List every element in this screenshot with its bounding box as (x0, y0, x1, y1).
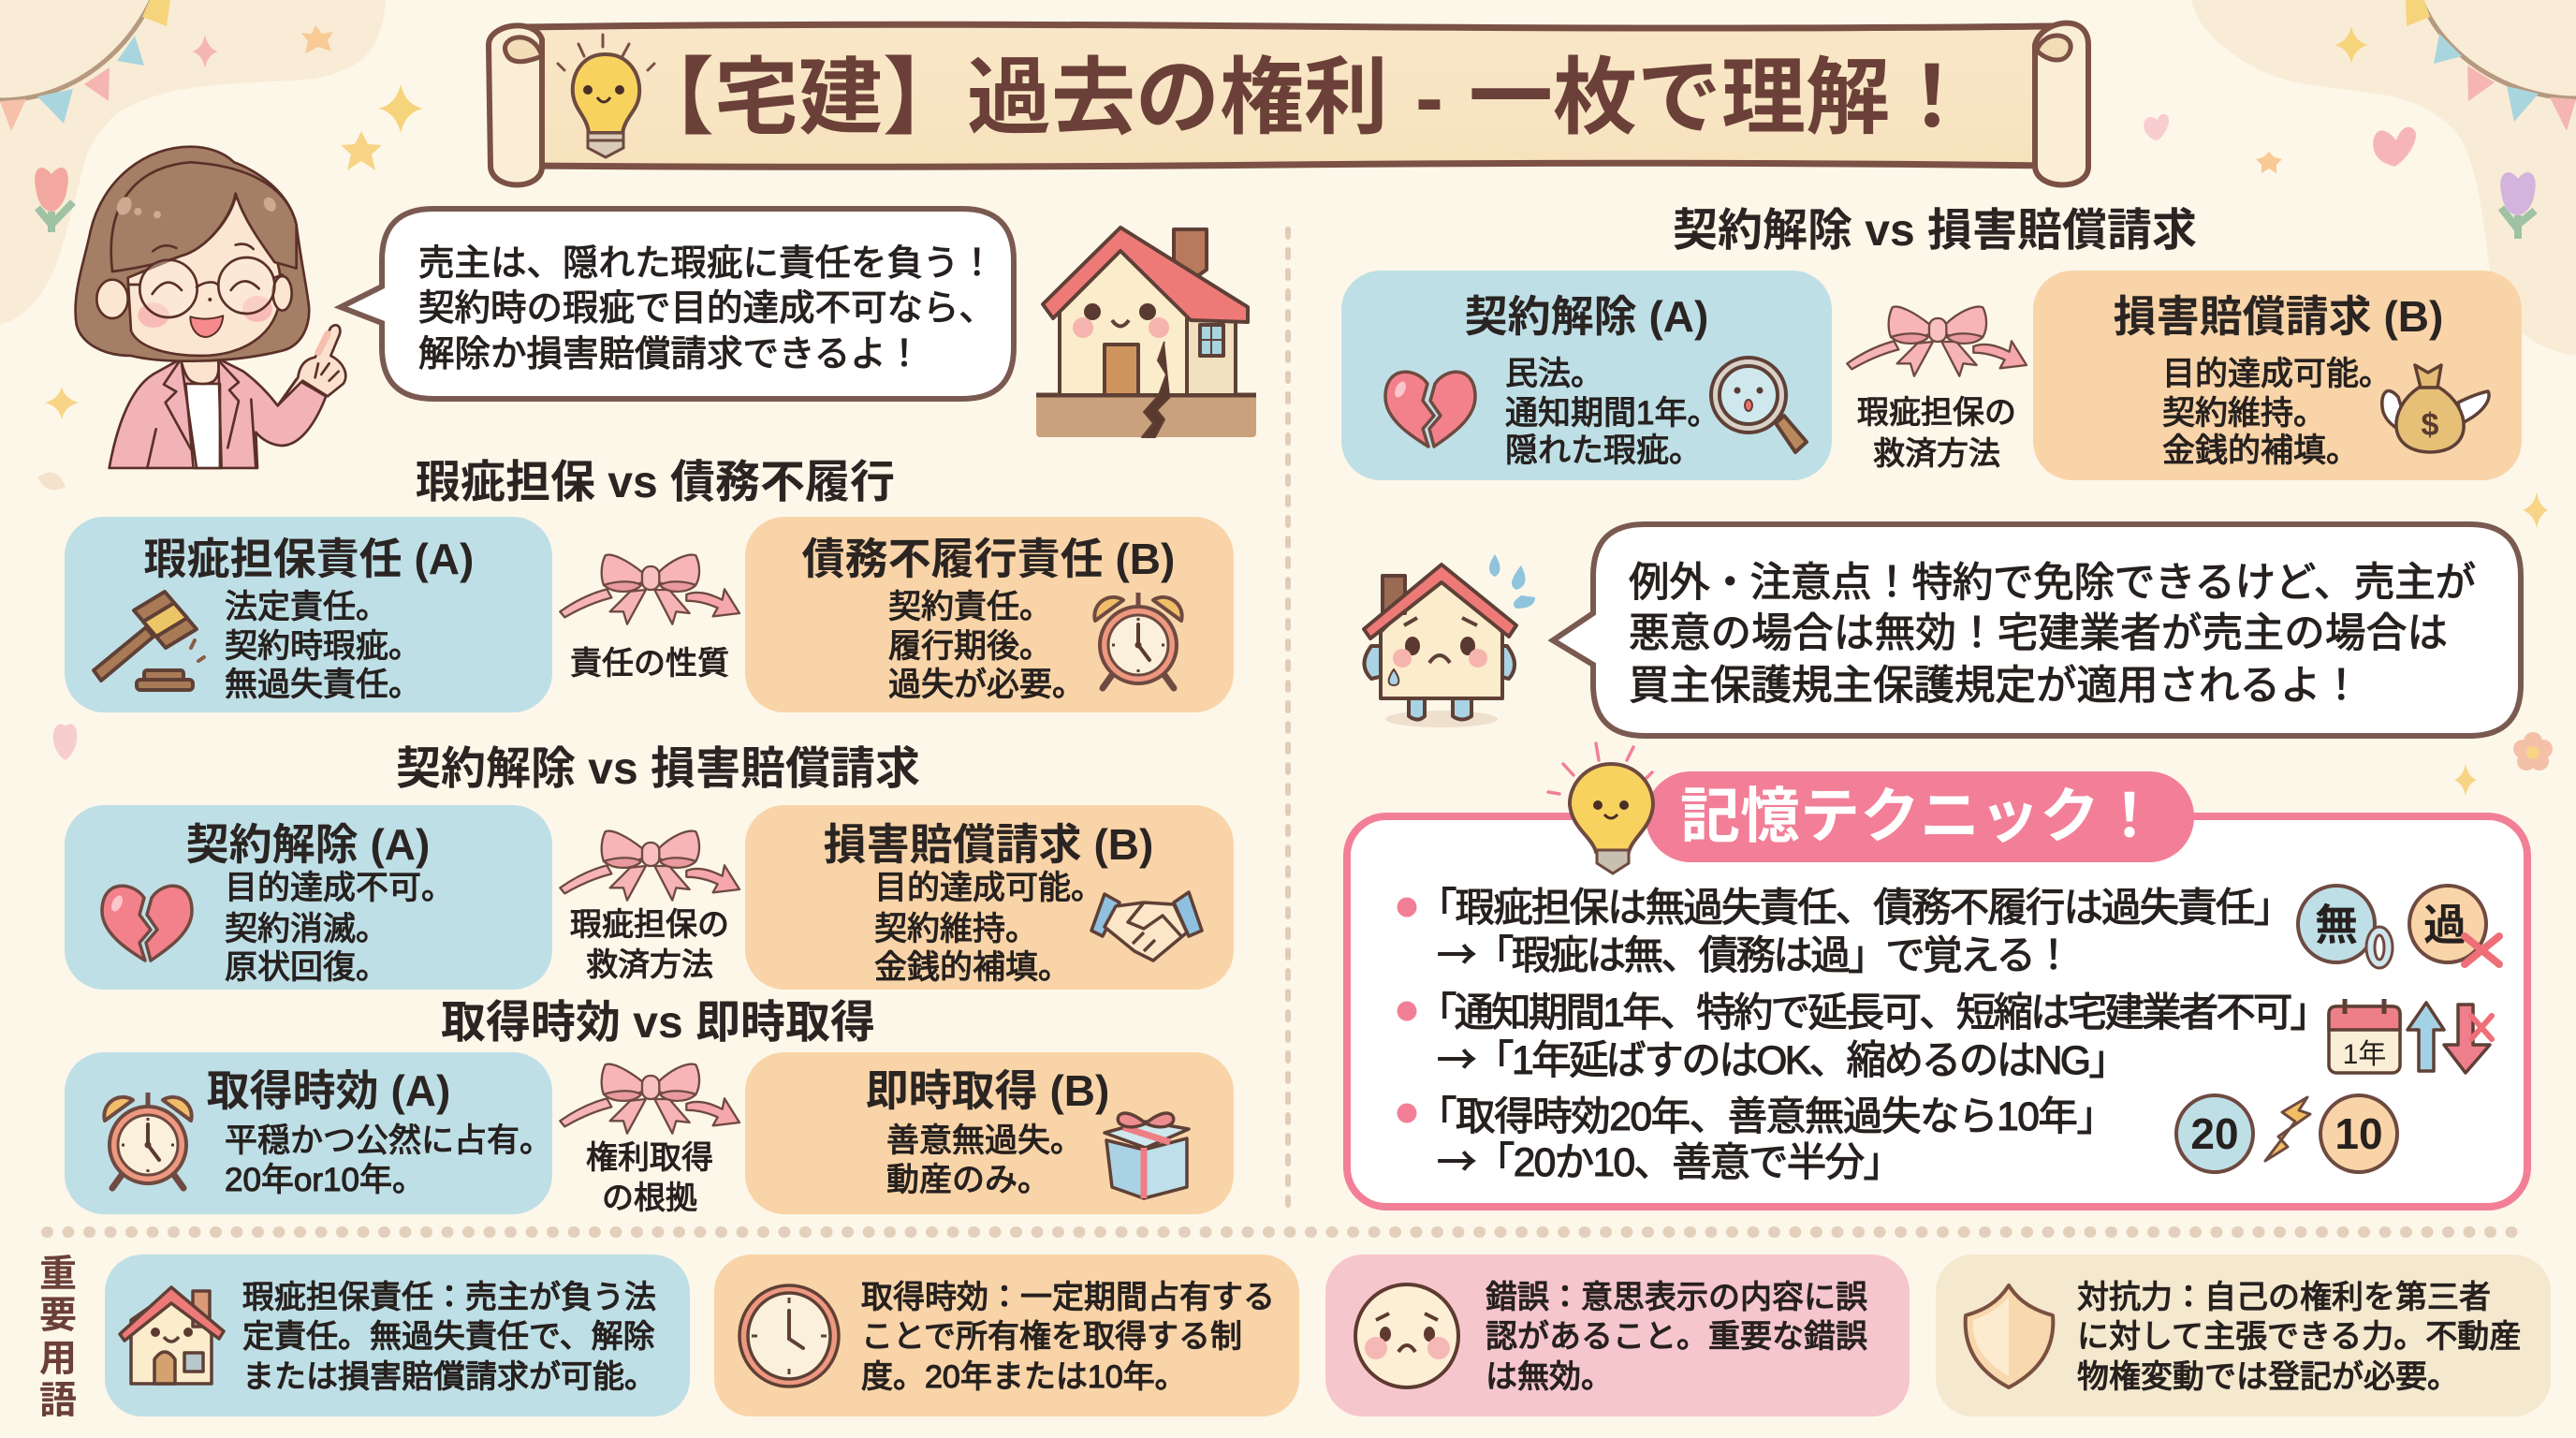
icons: 無 and 過: 無 (2315, 901, 2358, 949)
heading pill (1646, 771, 2194, 862)
term text: 取得時効：一定期間占有する (861, 1280, 1275, 1315)
icon: winged money bag: $ (2422, 407, 2439, 443)
panel body: 通知期間1年。 (1505, 395, 1720, 432)
connector label: 責任の性質 (570, 646, 729, 682)
decoration: top-right corner blob (2191, 0, 2576, 356)
panel body: 民法。 (1505, 356, 1603, 392)
connector label: の根拠 (602, 1181, 697, 1216)
term text: 認があること。重要な錯誤 (1486, 1319, 1867, 1355)
scroll right curl (2035, 23, 2088, 184)
speech bubble: seller liability: 解除か損害賠償請求できるよ！ (418, 334, 922, 374)
bubble shape (341, 209, 1014, 399)
term text: 瑕疵担保責任：売主が負う法 (242, 1280, 656, 1315)
decoration: right tulip (2500, 172, 2536, 239)
panel body: 善意無過失。 (886, 1123, 1083, 1159)
icon: cracked house (1036, 227, 1256, 437)
comparison 1 heading: 瑕疵担保 vs 債務不履行 (416, 458, 895, 507)
icon: alarm clock (1094, 593, 1182, 688)
icons: 20 and 10 with lightning: 10 (2334, 1109, 2383, 1158)
panel body (225, 1123, 552, 1198)
center dotted divider (1285, 229, 1291, 1208)
bubble text: 例外・注意点！特約で免除できるけど、売主が (1629, 561, 2476, 606)
panel body (2162, 356, 2392, 469)
connector label: 瑕疵担保の (570, 907, 729, 943)
icon: sad face (1355, 1284, 1458, 1387)
icon: gavel (94, 592, 204, 690)
decoration: sparkles and flowers (35, 25, 2553, 797)
term text: は無効。 (1486, 1359, 1613, 1395)
panel: right 契約解除 A (1341, 271, 1832, 480)
term text: または損害賠償請求が可能。 (242, 1359, 656, 1395)
panel body: 平穏かつ公然に占有。 (225, 1123, 552, 1159)
connector: ribbon arrow 1 (560, 555, 739, 624)
title text: 【宅建】過去の権利 (630, 51, 1388, 145)
panel title: 即時取得 (B) (866, 1066, 1109, 1115)
panel: memory techniques (1347, 743, 2527, 1207)
icons: 20 and 10 with lightning (2176, 1095, 2397, 1172)
connector label (586, 1140, 713, 1216)
panel body: 20年or10年。 (225, 1162, 425, 1198)
panel title: 損害賠償請求 (B) (824, 820, 1153, 869)
panel title: 瑕疵担保責任 (A) (144, 535, 474, 583)
panel body (225, 589, 421, 703)
comparison 3 heading: 取得時効 vs 即時取得 (441, 998, 875, 1048)
icon: winged money bag (2382, 365, 2489, 452)
term text: 錯誤：意思表示の内容に誤 (1486, 1280, 1867, 1315)
panel body: 過失が必要。 (888, 667, 1085, 703)
bubble shape (1553, 524, 2521, 736)
label: 重要用語: 重 (39, 1254, 77, 1295)
panel body: 動産のみ。 (886, 1162, 1050, 1198)
term text: ことで所有権を取得する制 (861, 1319, 1242, 1355)
term text: 定責任。無過失責任で、解除 (242, 1319, 655, 1355)
bubble text: 売主は、隠れた瑕疵に責任を負う！ (418, 243, 995, 284)
title banner (489, 23, 2088, 184)
speech bubble: exceptions: 悪意の場合は無効！宅建業者が売主の場合は (1629, 611, 2448, 656)
term text (242, 1280, 656, 1395)
panel: right 損害賠償請求 B (2033, 271, 2522, 480)
panel: 損害賠償請求 B (745, 805, 1234, 990)
panel body: 隠れた瑕疵。 (1505, 433, 1702, 469)
connector label: 救済方法 (586, 947, 713, 983)
panel: 契約解除 A (65, 805, 552, 990)
panel: 即時取得 B (745, 1052, 1234, 1214)
tip 2: 「通知期間1年、特約で延長可、短縮は宅建業者不可」 (1417, 991, 2330, 1035)
term text: 物権変動では登記が必要。 (2077, 1359, 2459, 1395)
icon: light bulb (1548, 743, 1653, 873)
tip 1: →「瑕疵は無、債務は過」で覚える！ (1437, 924, 2073, 981)
term card: 錯誤 (1325, 1255, 1910, 1416)
tip 3 (1397, 1095, 2116, 1188)
decoration: top-left bunting (0, 0, 170, 131)
speech bubble: exceptions: 買主保護規主保護規定が適用されるよ！ (1629, 664, 2362, 709)
icon: broken heart (102, 886, 192, 961)
term card: 取得時効 (714, 1255, 1299, 1416)
tip 2: →「1年延ばすのはOK、縮めるのはNG」 (1437, 1029, 2129, 1086)
panel body (886, 1123, 1083, 1198)
connector label: 瑕疵担保の (1857, 395, 2016, 431)
panel body: 契約維持。 (2162, 395, 2326, 432)
tip 1: 「瑕疵担保は無過失責任、債務不履行は過失責任」 (1417, 887, 2293, 931)
title text: - (1415, 51, 1443, 145)
connector: ribbon arrow 3 (560, 1064, 739, 1134)
panel title: 取得時効 (A) (207, 1066, 450, 1115)
term text: 対抗力：自己の権利を第三者 (2077, 1280, 2491, 1315)
memory box (1347, 816, 2527, 1207)
term text (861, 1280, 1275, 1395)
title text: 一枚で理解！ (1469, 51, 1974, 145)
panel body: 契約時瑕疵。 (225, 628, 421, 665)
panel body (888, 589, 1085, 703)
panel title: 契約解除 (A) (1465, 292, 1708, 341)
panel body: 原状回復。 (225, 949, 388, 986)
tip 2 (1397, 991, 2330, 1086)
decoration: top-right bunting (2406, 0, 2576, 131)
tip 1 (1397, 887, 2293, 981)
label: 重要用語: 用 (39, 1338, 77, 1379)
connector label (570, 907, 729, 983)
term text (2077, 1280, 2521, 1395)
panel body (1505, 356, 1720, 469)
icons: calendar and arrows (2329, 999, 2492, 1073)
panel title: 債務不履行責任 (B) (802, 535, 1175, 583)
icon: broken heart (1385, 372, 1475, 447)
decoration: left tulip (35, 168, 73, 232)
comparison 2 heading: 契約解除 vs 損害賠償請求 (396, 744, 920, 794)
tip 3: →「20か10、善意で半分」 (1437, 1131, 1903, 1188)
panel body (225, 870, 454, 986)
connector label (1857, 395, 2016, 472)
term card: 瑕疵担保責任 (105, 1255, 690, 1416)
panel body: 履行期後。 (888, 628, 1052, 665)
speech bubble: seller liability (341, 209, 1014, 399)
icon: handshake (1091, 892, 1202, 961)
decoration: top-left corner blob (0, 0, 386, 325)
connector: ribbon arrow right (1847, 307, 2027, 376)
icon: wall clock (739, 1285, 839, 1387)
panel body: 契約維持。 (874, 911, 1038, 947)
panel body: 目的達成不可。 (225, 870, 454, 906)
connector label: 救済方法 (1873, 436, 2000, 472)
icons: 20 and 10 with lightning: 20 (2190, 1109, 2239, 1158)
icon: house (120, 1287, 224, 1384)
icon: alarm clock (104, 1093, 192, 1188)
panel body: 無過失責任。 (225, 667, 421, 703)
label: 重要用語: 要 (39, 1295, 77, 1336)
term text: に対して主張できる力。不動産 (2077, 1319, 2521, 1355)
panel: 瑕疵担保責任 A (65, 517, 552, 712)
scroll band (524, 24, 2050, 167)
scroll left curl (489, 25, 542, 184)
term card: 対抗力 (1936, 1255, 2551, 1416)
icons: 無 and 過 (2298, 886, 2499, 968)
panel body: 契約責任。 (888, 589, 1052, 625)
panel body: 法定責任。 (225, 589, 388, 625)
icon: smiling light bulb (558, 35, 654, 157)
panel title: 契約解除 (A) (186, 820, 430, 869)
panel body: 金銭的補填。 (2162, 433, 2359, 469)
tip 3: 「取得時効20年、善意無過失なら10年」 (1417, 1095, 2116, 1139)
icon: gift box (1105, 1113, 1189, 1198)
icon: magnifier (1711, 358, 1807, 452)
speech bubble: exceptions (1553, 524, 2521, 736)
term text: 度。20年または10年。 (861, 1359, 1187, 1395)
panel body (874, 870, 1104, 986)
heading text: 記憶テクニック！ (1680, 783, 2159, 850)
panel body: 金銭的補填。 (874, 949, 1071, 986)
connector label: 権利取得 (586, 1140, 713, 1176)
panel: 取得時効 A (65, 1052, 552, 1214)
icons: 無 and 過: 過 (2423, 901, 2466, 949)
icons: calendar and arrows: 1年 (2343, 1039, 2386, 1070)
panel body: 契約消滅。 (225, 911, 388, 947)
horizontal dotted divider (47, 1226, 2513, 1238)
icon: worried house (1364, 554, 1535, 727)
right heading: 契約解除 vs 損害賠償請求 (1673, 206, 2197, 256)
character: teacher with glasses (76, 147, 345, 468)
connector: ribbon arrow 2 (560, 831, 739, 901)
speech bubble: seller liability: 契約時の瑕疵で目的達成不可なら、 (418, 288, 995, 329)
label: 重要用語 (39, 1254, 77, 1421)
panel body: 目的達成可能。 (874, 870, 1104, 906)
panel: 債務不履行責任 B (745, 517, 1234, 712)
term text (1486, 1280, 1867, 1395)
panel body: 目的達成可能。 (2162, 356, 2392, 392)
label: 重要用語: 語 (39, 1380, 77, 1421)
panel title: 損害賠償請求 (B) (2114, 292, 2443, 341)
icon: shield (1966, 1285, 2053, 1387)
